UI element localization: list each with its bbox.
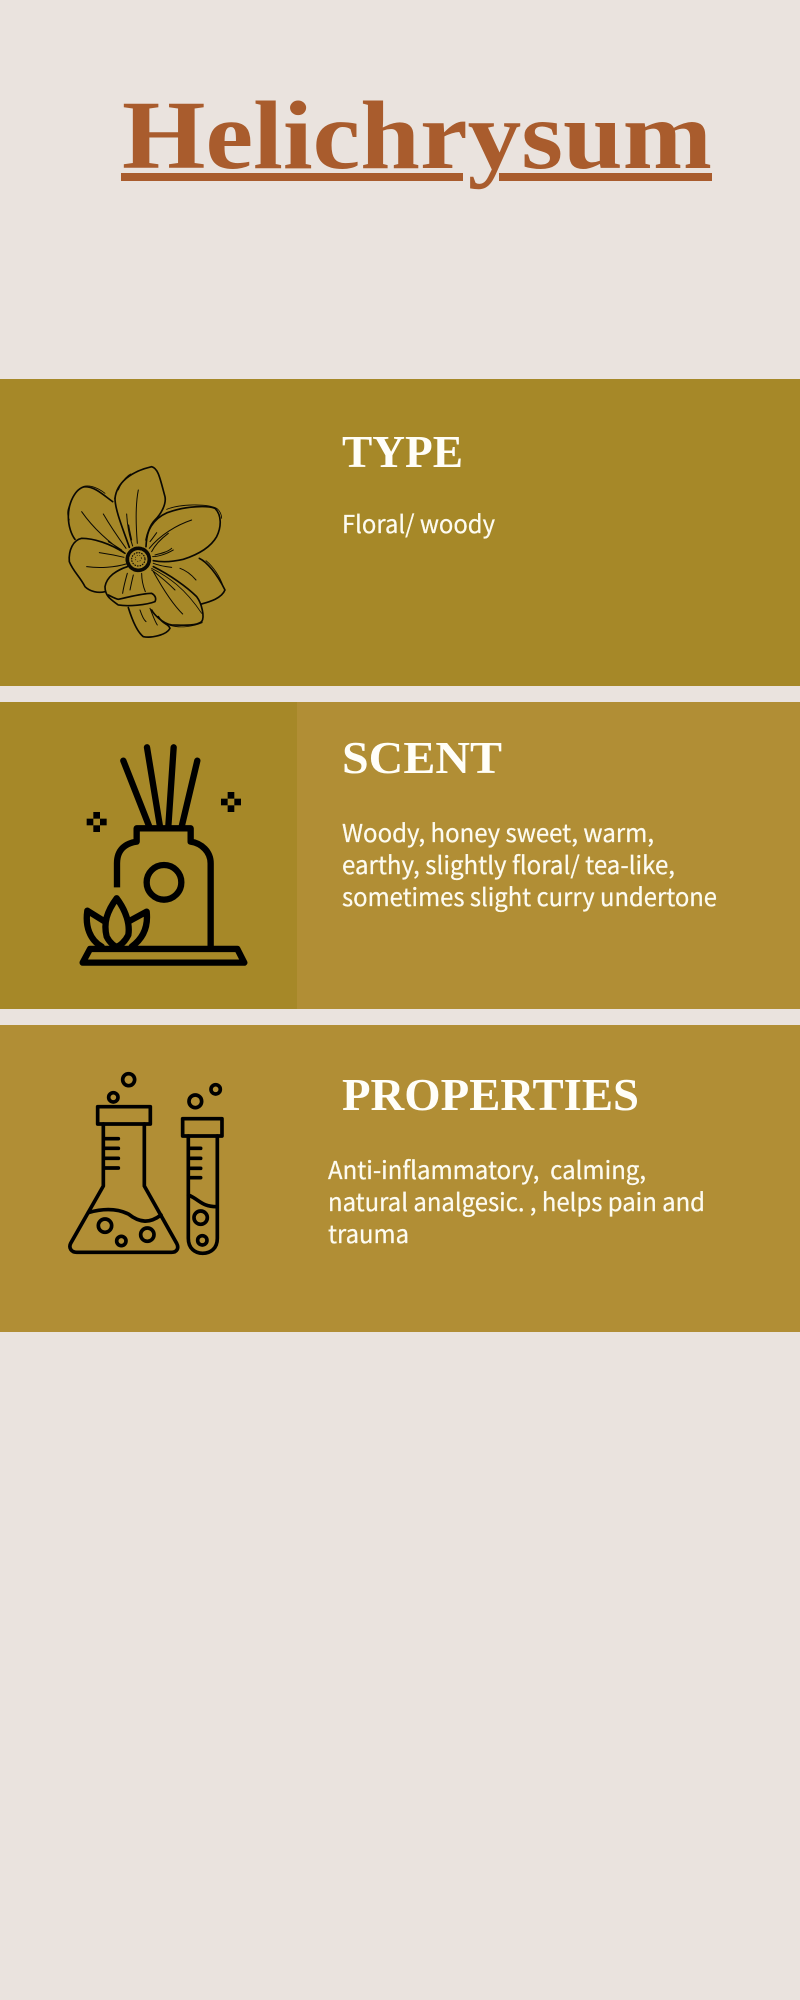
text: scent: earthy, slightly floral/ tea-like,: [342, 847, 675, 882]
panel: scent: [0, 702, 800, 1009]
text: type: Floral/ woody: [342, 506, 495, 541]
text: properties: natural analgesic. , helps pain and: [328, 1184, 705, 1219]
heading: scent: SCENT: [342, 732, 502, 783]
title: Helichrysum: [122, 82, 712, 189]
icon: flower: [68, 467, 225, 637]
icon: reed diffuser: [83, 747, 244, 963]
panel: type: [0, 379, 800, 686]
text: properties: trauma: [328, 1216, 409, 1251]
text: properties: [328, 1152, 705, 1251]
heading: properties: PROPERTIES: [342, 1069, 639, 1120]
text: scent: [342, 815, 717, 914]
heading: type: TYPE: [342, 426, 463, 477]
text: scent: sometimes slight curry undertone: [342, 879, 717, 914]
text: scent: Woody, honey sweet, warm,: [342, 815, 654, 850]
panel: properties: [0, 1025, 800, 1332]
icon: laboratory flasks: [70, 1074, 222, 1253]
text: properties: Anti-inflammatory, calming,: [328, 1152, 646, 1187]
